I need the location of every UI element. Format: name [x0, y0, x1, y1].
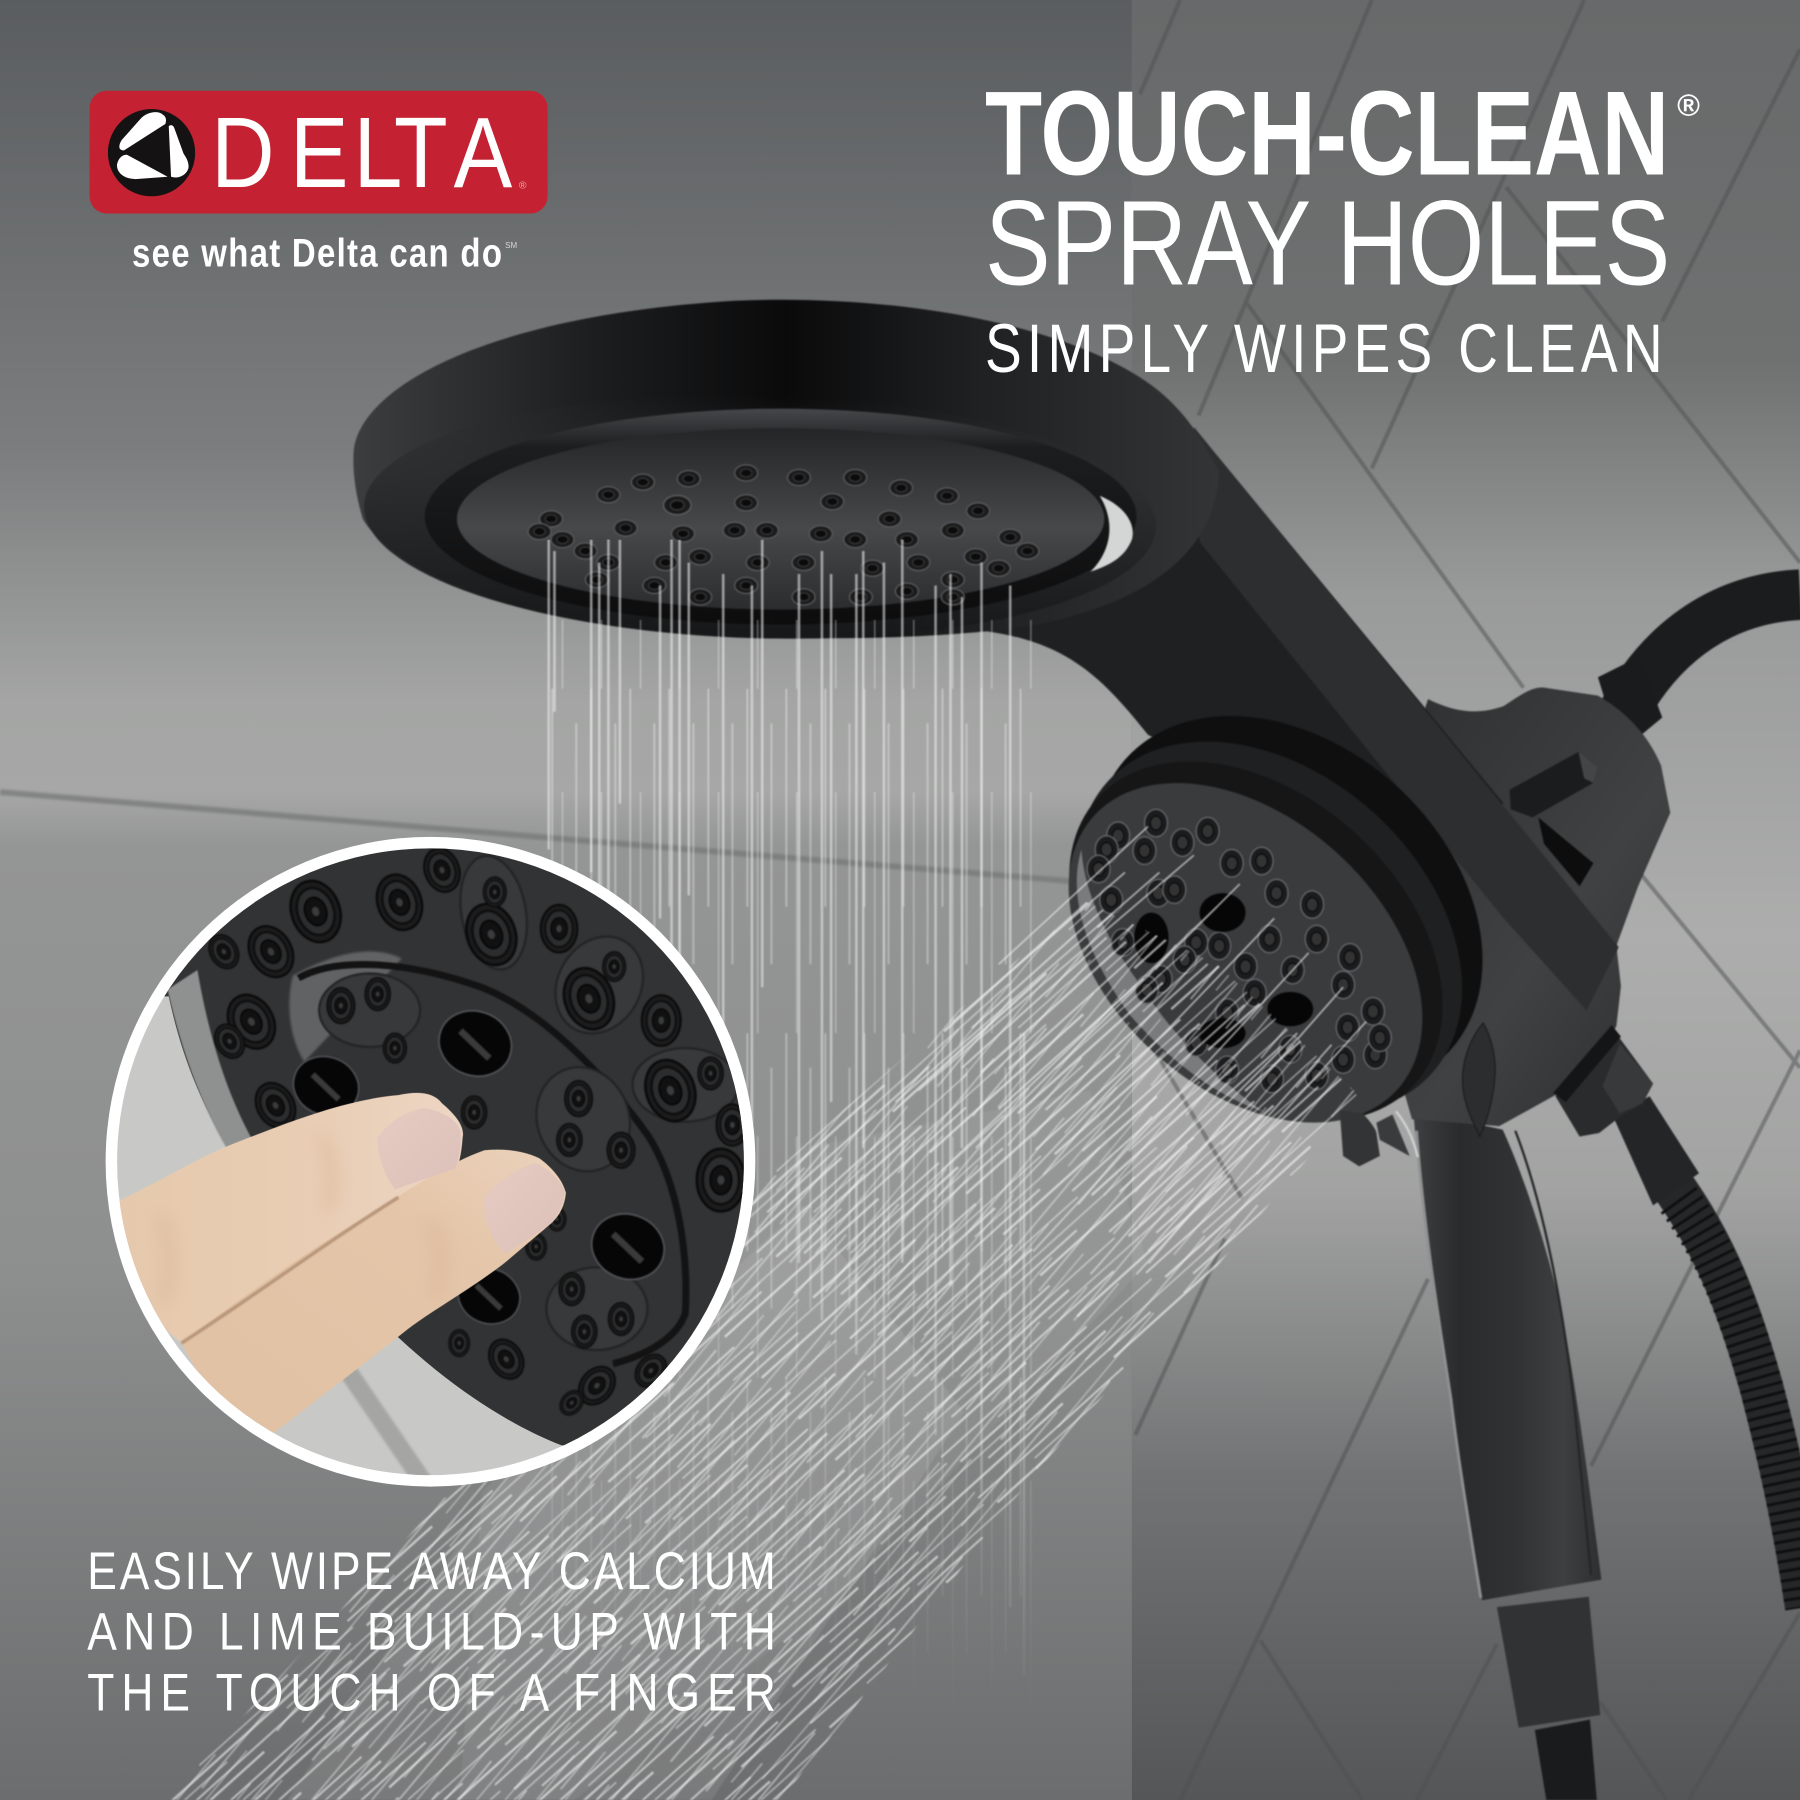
- diagonal spray from handheld head: [166, 827, 1366, 1800]
- background: herringbone tile grout lines: [1135, 0, 1800, 1800]
- caption text: [87, 1542, 776, 1722]
- spray face holes: [528, 465, 1039, 605]
- inner groove: [298, 965, 686, 1364]
- upper supply hose: [1598, 595, 1800, 752]
- logo: registered mark: ®: [519, 180, 527, 191]
- main rain shower head: [353, 300, 1619, 1010]
- streaks across the face: [895, 827, 1366, 1274]
- logo: wordmark: DELTA: [211, 97, 512, 208]
- title block: [985, 67, 1700, 387]
- vertical spray from rain head: [546, 540, 1032, 1637]
- title: registered mark: ®: [1677, 88, 1700, 123]
- raised nozzle blobs: [319, 851, 738, 1350]
- spray face: [457, 428, 1104, 610]
- title: regular line: SPRAY HOLES: [985, 176, 1670, 311]
- callout: finger wiping the spray holes: [103, 827, 804, 1492]
- tagline: see what Delta can do: [132, 230, 502, 275]
- silver rim: [1077, 849, 1263, 1111]
- arm stripe: [1194, 427, 1619, 1010]
- caption text: EASILY WIPE AWAY CALCIUM: [87, 1542, 776, 1601]
- tagline: SM: [505, 241, 517, 250]
- shower mount housing: [1355, 688, 1699, 1205]
- silver rim reflection: [167, 970, 252, 1147]
- caption text: THE TOUCH OF A FINGER: [87, 1664, 776, 1722]
- front rim: [361, 385, 1159, 649]
- neck: [987, 390, 1504, 827]
- spray nozzles: [203, 843, 748, 1420]
- background: left wall: [0, 0, 1132, 1800]
- lever tabs: [1340, 1110, 1418, 1166]
- face: [1003, 715, 1488, 1190]
- middle ring: [1004, 666, 1535, 1189]
- finger crease: [181, 1197, 398, 1343]
- lower finger: [181, 1150, 566, 1435]
- shower face disc: [164, 848, 744, 1446]
- slot: [1538, 817, 1593, 886]
- caption text: AND LIME BUILD-UP WITH: [87, 1603, 776, 1662]
- lower fingernail: [484, 1163, 565, 1254]
- title: sub line: SIMPLY WIPES CLEAN: [985, 311, 1663, 387]
- flexible hand shower hose: [1670, 1182, 1800, 1607]
- lit bevel: [425, 409, 1136, 624]
- background: right tiled wall: [1132, 0, 1800, 1800]
- front ring: [999, 689, 1513, 1193]
- logo: black circle mark: [108, 109, 195, 196]
- hand shower handle: [1413, 1110, 1601, 1800]
- upper finger: [103, 1093, 463, 1343]
- knuckle shading: [170, 1144, 338, 1280]
- callout backdrop: [103, 838, 758, 1492]
- back ring: [1018, 639, 1558, 1170]
- head body: [353, 300, 1219, 638]
- callout white ring: [106, 837, 755, 1487]
- mount flap: [1462, 1023, 1495, 1136]
- face holes: [1087, 809, 1391, 1093]
- background: wall horizontal seam: [0, 792, 1132, 886]
- handheld shower head: [999, 639, 1558, 1193]
- highlight crescent: [1091, 496, 1133, 572]
- logo: Delta red badge: [90, 91, 548, 214]
- upper fingernail: [378, 1108, 461, 1189]
- slider knob: [1510, 752, 1598, 817]
- hose fitting: [1553, 1025, 1699, 1205]
